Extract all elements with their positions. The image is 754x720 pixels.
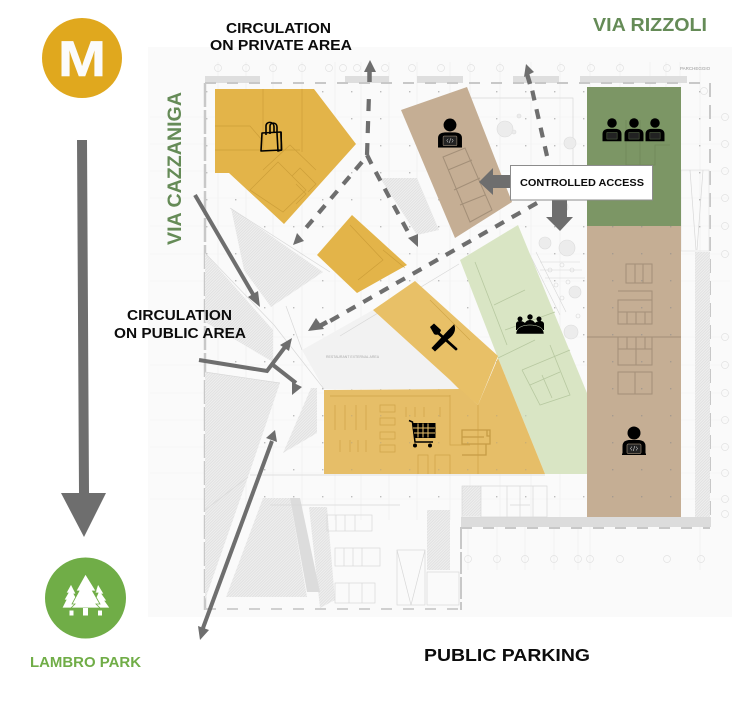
arrow: controlled access down [546,200,573,231]
label: Lambro Park: LAMBRO PARK [30,654,141,671]
heading: circulation on public area: CIRCULATION [127,308,232,324]
icon: trees [62,574,110,616]
heading: circulation on private area: ON PRIVATE AREA [210,38,353,54]
panel: floor plan background: PARCHEGGIO [680,66,711,71]
icon: fork and knife [430,324,456,351]
callout: controlled access: CONTROLLED ACCESS [520,177,644,189]
zone: yellow central block [317,215,407,293]
icon: park badge [45,558,126,638]
arrow: metro to park [61,140,106,537]
top hatched wall strips [205,76,687,83]
zone: light green meeting [460,225,587,474]
arrow: north from junction [364,60,376,155]
heading: circulation on private area [210,21,353,54]
icon: shopping cart [409,420,435,448]
lower floor rooms [327,486,547,605]
zone: restaurant [373,281,505,405]
arrow: double-headed to park [198,430,277,640]
icon: coder diagonal office [438,119,462,148]
icon: shopping bag [261,122,282,151]
label: public parking: PUBLIC PARKING [424,645,590,665]
icon: team of three coders [603,118,664,141]
panel: floor plan background [148,47,732,617]
arrow: from north-west [195,195,260,307]
arrow: south-east from junction [367,155,418,247]
icon: metro badge [42,18,122,98]
heading: circulation on public area: ON PUBLIC AREA [114,326,247,342]
courtyard trees [497,114,581,339]
arrow: long diagonal walkway [308,203,537,331]
grid bubbles along the top [214,64,728,562]
arrow: south-west from junction [293,162,362,245]
arrow: north-east to via Rizzoli [524,64,547,156]
zone: green offices [587,87,681,226]
label: via Rizzoli: VIA RIZZOLI [593,14,707,35]
heading: circulation on public area [114,308,247,342]
arrow: from west forked [199,338,302,395]
arrows: public circulation [195,195,302,640]
restaurant external area [302,310,459,389]
callout: controlled access [510,166,652,200]
icon: coder right office [622,426,646,455]
building perimeter walls [205,83,710,610]
zone: supermarket [324,358,545,474]
label: via Cazzaniga: VIA CAZZANIGA [165,92,186,245]
icon: metro badge: M [58,31,106,87]
icon: meeting table [516,314,544,334]
panel: floor plan background: RESTAURANT EXTERNAL AREA [326,355,380,359]
arrow: controlled access left [479,168,511,195]
zone: brown office diagonal [401,87,512,238]
hatched planting areas [205,178,481,608]
zone: shop [215,89,356,224]
heading: circulation on private area: CIRCULATION [226,21,331,37]
arrows: private circulation [293,60,547,331]
zone: brown offices right [587,226,681,517]
